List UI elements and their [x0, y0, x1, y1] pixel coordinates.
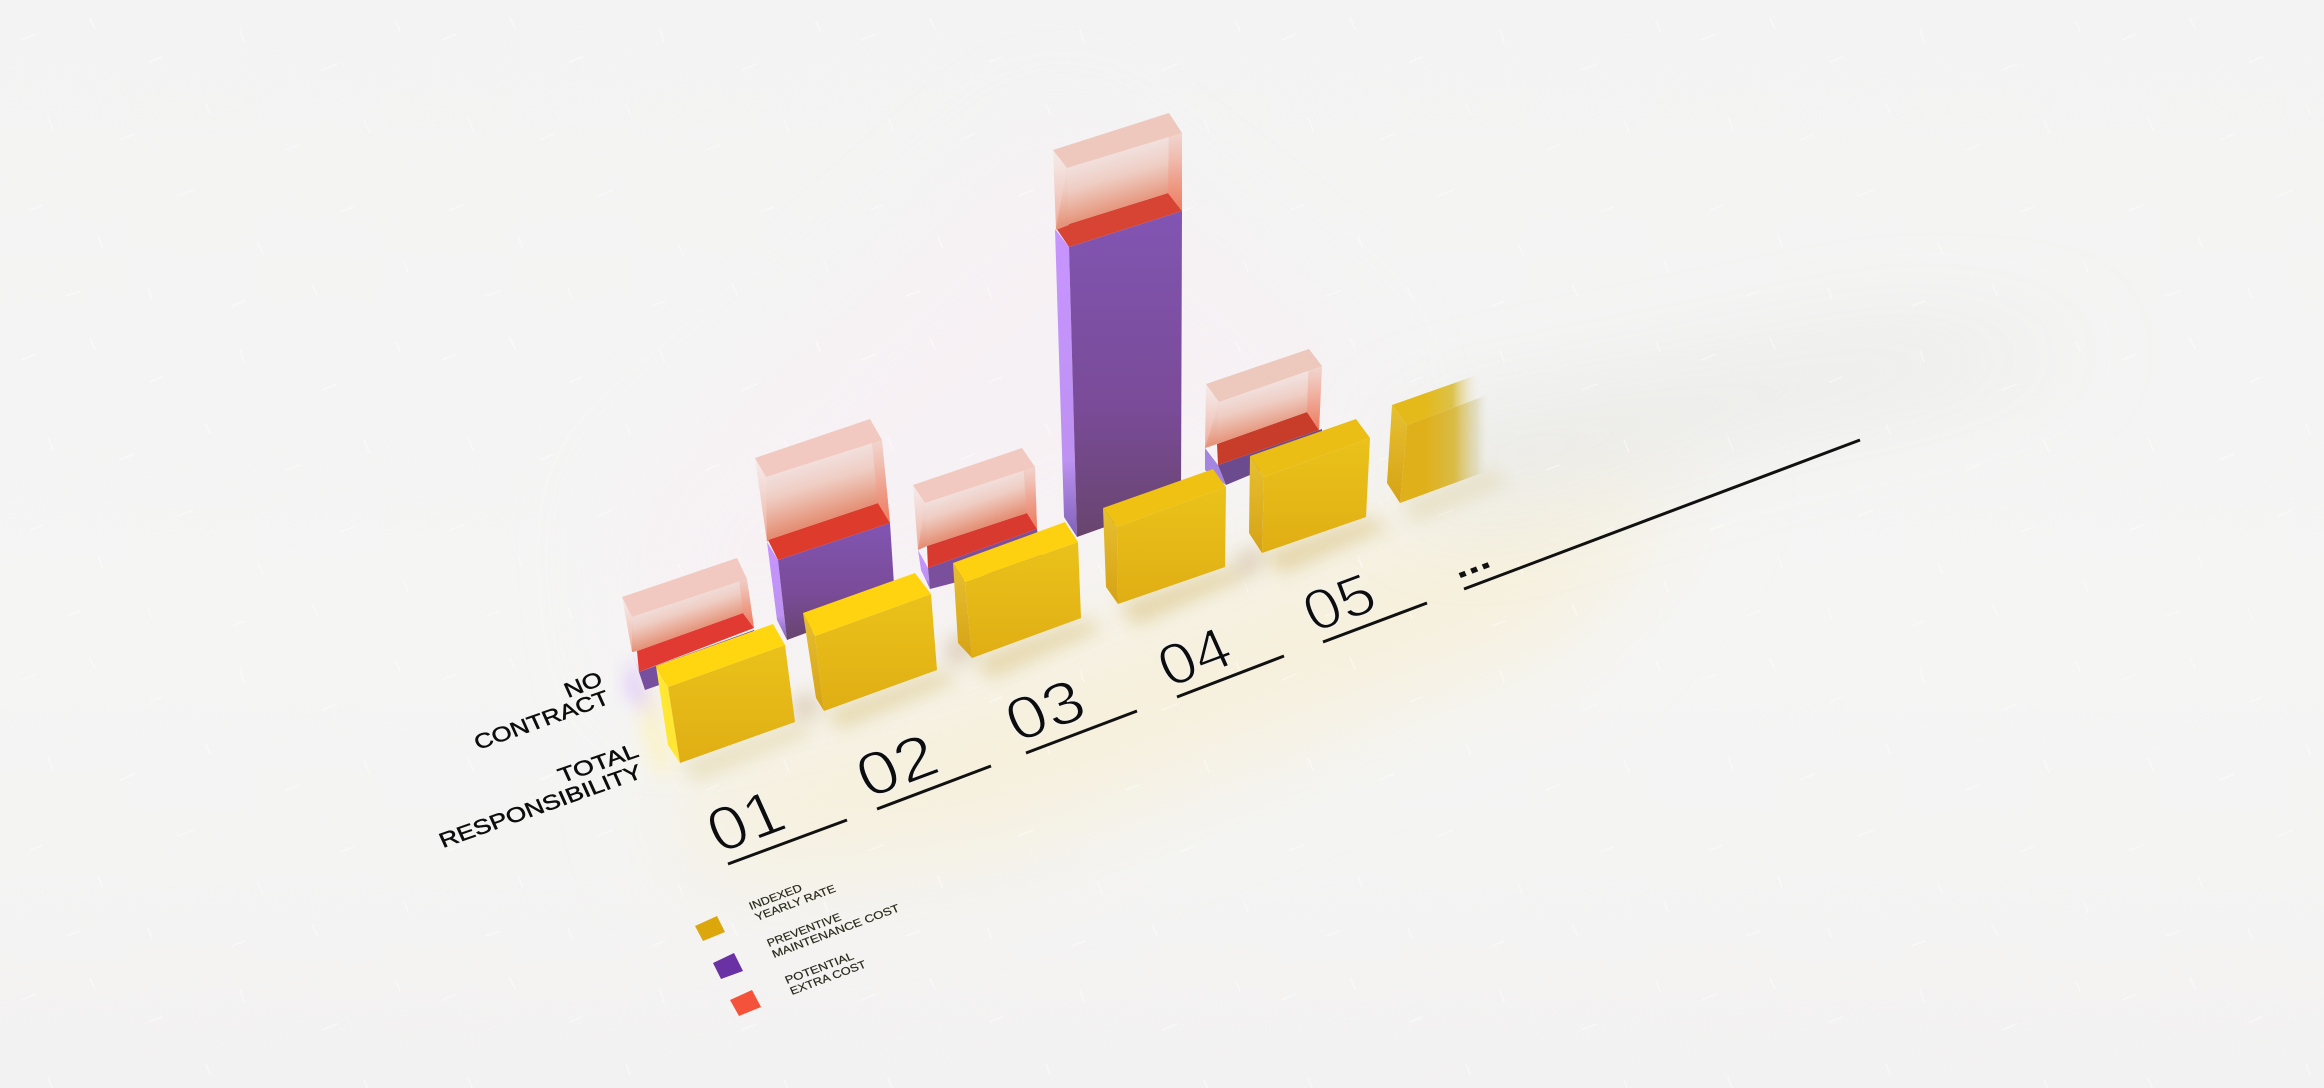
legend item: potential extra cost: EXTRA COST [788, 959, 868, 998]
bar 04 translucent ghost volume [1053, 113, 1182, 230]
bar 01 translucent ghost volume [622, 558, 754, 652]
label: total responsibility: RESPONSIBILITY [436, 761, 646, 853]
legend item: preventive maintenance cost [713, 903, 902, 979]
legend item: preventive maintenance cost: MAINTENANCE COST [770, 903, 902, 961]
axis label 01 [696, 777, 847, 867]
legend item: indexed yearly rate: INDEXED [747, 882, 804, 913]
axis label 04 [1148, 615, 1284, 700]
axis label 04: 04 [1148, 615, 1242, 700]
bar 02 purple maintenance [767, 523, 895, 640]
bar 03: no contract [913, 448, 1042, 589]
bar 05 red extra cost top [1217, 412, 1319, 465]
label: no contract: NO [561, 668, 606, 703]
bar 03 translucent ghost volume [913, 448, 1037, 550]
bar 04 purple maintenance [1055, 211, 1182, 537]
legend item: indexed yearly rate [695, 882, 838, 941]
bar 04 red extra cost top [1056, 193, 1182, 247]
axis continuation with ellipsis [1444, 440, 1860, 589]
block 01: total responsibility [656, 624, 795, 763]
label: no contract [471, 668, 613, 755]
bar 02 red extra cost top [768, 503, 890, 560]
label: total responsibility: TOTAL [555, 740, 642, 788]
bar 04: no contract tall outlier [1053, 113, 1182, 537]
bar 05 translucent ghost volume [1205, 349, 1322, 448]
block 03: total responsibility [953, 522, 1081, 658]
legend [695, 882, 902, 1016]
legend item: potential extra cost: POTENTIAL [783, 951, 856, 987]
axis label 05: 05 [1293, 562, 1386, 645]
contact shadows under blocks [625, 470, 1510, 782]
bar 05 purple maintenance [1205, 429, 1322, 485]
axis label 01: 01 [696, 777, 796, 867]
block 02: total responsibility [803, 573, 937, 711]
bar 03 purple maintenance [918, 529, 1042, 589]
label: no contract: CONTRACT [471, 687, 613, 755]
bar 02: no contract [755, 419, 895, 640]
axis label 05 [1293, 562, 1427, 645]
label: total responsibility [436, 740, 646, 853]
bar 01: no contract [622, 558, 760, 690]
axis label 02 [845, 721, 991, 812]
axis label 03 [994, 666, 1137, 755]
bar 05: no contract [1205, 349, 1322, 485]
bar 03 red extra cost top [927, 513, 1037, 568]
block 04: total responsibility [1103, 469, 1226, 604]
axis label 03: 03 [994, 666, 1095, 755]
bar 02 translucent ghost volume [755, 419, 890, 542]
legend item: indexed yearly rate: YEARLY RATE [753, 883, 838, 924]
axis continuation with ellipsis: ... [1444, 536, 1496, 586]
block 05: total responsibility [1249, 419, 1370, 553]
bar 01 red extra cost top [637, 613, 754, 672]
legend item: preventive maintenance cost: PREVENTIVE [765, 912, 843, 950]
legend item: potential extra cost [730, 951, 868, 1016]
bar 01 purple maintenance [632, 630, 760, 690]
block 06: fading continuation [1387, 374, 1490, 503]
axis label 02: 02 [845, 721, 949, 812]
